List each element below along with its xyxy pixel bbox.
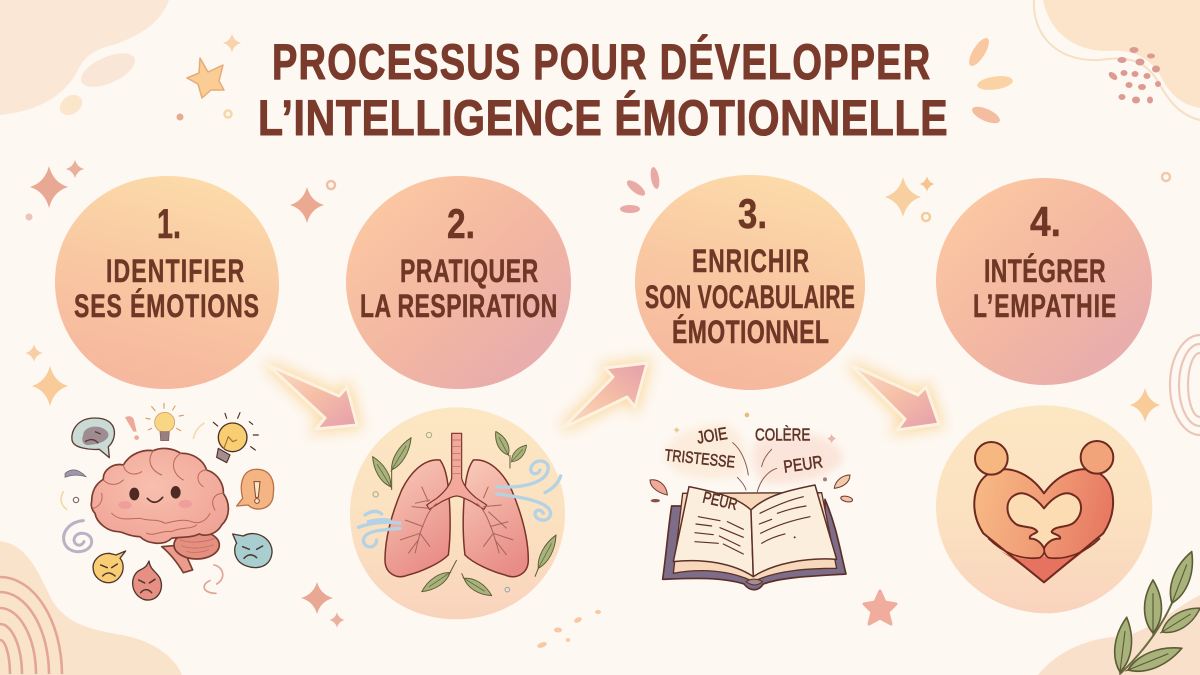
decorative marks <box>650 413 853 503</box>
lungs background blob <box>350 407 565 619</box>
title: PROCESSUS POUR DÉVELOPPER <box>272 34 930 90</box>
icon: yellow angry face <box>93 551 126 583</box>
icon: swirls and marks <box>61 423 223 593</box>
icon: sad speech bubble <box>72 418 114 458</box>
step 2 circle <box>346 176 571 389</box>
icon: heart formed by two people <box>974 441 1113 582</box>
decoration: bottom left corner <box>0 541 182 675</box>
step 4 number: 4. <box>1030 198 1061 245</box>
illustration: brain with emotions <box>61 403 274 600</box>
arrow 3 to 4 <box>851 365 939 430</box>
step 2 label <box>360 253 557 324</box>
book page word: PEUR <box>701 489 739 514</box>
step 4 label: L’EMPATHIE <box>973 288 1116 324</box>
step 3 circle <box>635 175 865 390</box>
icon: small lightbulb <box>146 403 183 441</box>
step 2 number: 2. <box>447 200 475 247</box>
decoration: bottom right corner with branch <box>1038 549 1200 675</box>
illustration: lungs <box>350 407 565 619</box>
step 4 label: INTÉGRER <box>984 253 1106 289</box>
arrow 2 to 3 <box>563 363 647 428</box>
icon: blue angry face <box>233 534 272 568</box>
word labels: PEUR <box>782 451 824 477</box>
word labels: COLÈRE <box>755 425 810 445</box>
icon: open book <box>663 485 846 590</box>
step 3 label <box>645 243 855 350</box>
icon: exclamation mark <box>125 416 139 440</box>
icon: brain <box>91 448 228 573</box>
icon: lungs <box>385 433 528 577</box>
word clouds <box>663 423 843 484</box>
step 3 label: ÉMOTIONNEL <box>672 314 829 350</box>
word labels: TRISTESSE <box>664 446 736 472</box>
word labels: JOIE <box>695 423 729 448</box>
step 3 label: SON VOCABULAIRE <box>645 278 855 315</box>
decoration: top right corner <box>965 0 1200 127</box>
step 3 label: ENRICHIR <box>692 243 809 279</box>
arrow 1 to 2 <box>268 365 357 429</box>
step 2 label: LA RESPIRATION <box>360 288 557 324</box>
title: L’INTELLIGENCE ÉMOTIONNELLE <box>258 90 948 146</box>
step 1 label <box>74 253 259 324</box>
icon: large lightbulb <box>213 413 258 463</box>
icon: wind swirls <box>358 461 561 547</box>
word trails <box>733 443 777 492</box>
decoration: top left corner <box>0 0 241 120</box>
decoration: right side concentric arcs <box>1170 335 1200 435</box>
illustration: empathy heart <box>936 405 1152 613</box>
step 1 label: IDENTIFIER <box>106 253 244 289</box>
step 1 circle <box>55 176 279 389</box>
step 4 circle <box>936 178 1152 385</box>
icon: red angry face <box>133 561 161 600</box>
title <box>258 34 948 146</box>
word labels <box>664 423 824 477</box>
illustration: book with emotion words <box>650 413 853 590</box>
icon: exclamation speech bubble <box>237 469 274 509</box>
step 1 number: 1. <box>157 200 181 247</box>
step 3 number: 3. <box>738 190 767 237</box>
step 1 label: SES ÉMOTIONS <box>74 288 259 324</box>
heart background blob <box>936 405 1152 613</box>
step 2 label: PRATIQUER <box>400 253 538 289</box>
decoration: sparkles and dots <box>26 160 1170 649</box>
step 4 label <box>973 253 1116 324</box>
icon: leaves <box>369 429 560 600</box>
